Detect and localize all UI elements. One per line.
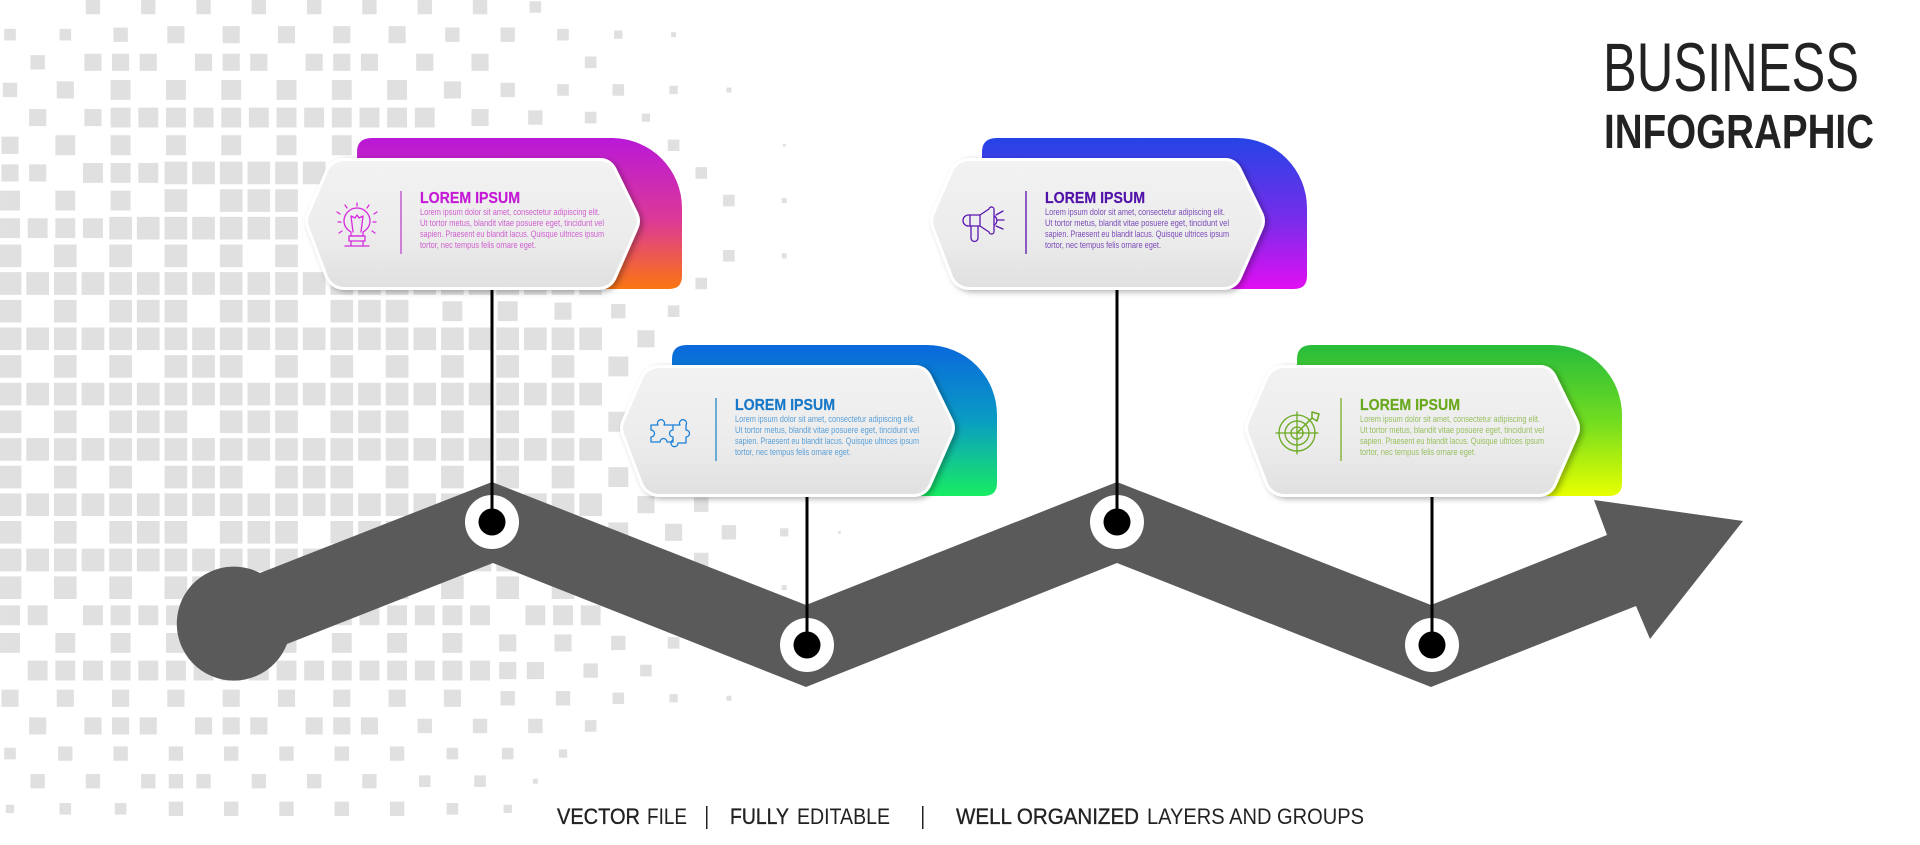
panel: idea bbox=[306, 138, 682, 289]
hexagon card bbox=[622, 366, 954, 496]
footer tagline: VECTOR bbox=[557, 804, 640, 829]
marker 2 bbox=[780, 610, 834, 672]
body text: tortor, nec tempus felis ornare eget. bbox=[735, 447, 851, 458]
gradient backing tab bbox=[982, 138, 1307, 289]
body text bbox=[1045, 207, 1229, 251]
body text: tortor, nec tempus felis ornare eget. bbox=[1360, 447, 1476, 458]
icon: puzzle pieces bbox=[651, 420, 690, 447]
body text: sapien. Praesent eu blandit lacus. Quisque ultrices ipsum bbox=[735, 436, 919, 447]
leader lines bbox=[492, 288, 1432, 645]
divider bbox=[1340, 398, 1342, 461]
gradient backing tab bbox=[357, 138, 682, 289]
divider bbox=[1025, 191, 1027, 254]
heading: LOREM IPSUM bbox=[420, 190, 520, 207]
body text bbox=[420, 207, 604, 251]
hexagon card bbox=[1246, 366, 1578, 496]
heading: LOREM IPSUM bbox=[735, 397, 835, 414]
gradient backing tab bbox=[672, 345, 997, 496]
body text bbox=[735, 414, 919, 458]
body text: Lorem ipsum dolor sit amet, consectetur adipiscing elit. bbox=[1360, 414, 1540, 425]
body text: Ut tortor metus, blandit vitae posuere eget, tincidunt vel bbox=[1360, 425, 1544, 436]
body text: Lorem ipsum dolor sit amet, consectetur adipiscing elit. bbox=[735, 414, 915, 425]
body text: sapien. Praesent eu blandit lacus. Quisque ultrices ipsum bbox=[420, 229, 604, 240]
body text: Ut tortor metus, blandit vitae posuere eget, tincidunt vel bbox=[735, 425, 919, 436]
timeline arrow bbox=[177, 482, 1743, 687]
hexagon card bbox=[306, 160, 638, 288]
panel: target bbox=[1246, 345, 1622, 496]
body text: Ut tortor metus, blandit vitae posuere eget, tincidunt vel bbox=[420, 218, 604, 229]
footer tagline: WELL ORGANIZED bbox=[956, 804, 1139, 829]
body text: tortor, nec tempus felis ornare eget. bbox=[420, 240, 536, 251]
body text: Lorem ipsum dolor sit amet, consectetur adipiscing elit. bbox=[420, 207, 600, 218]
footer tagline bbox=[557, 804, 1364, 829]
body text: Ut tortor metus, blandit vitae posuere eget, tincidunt vel bbox=[1045, 218, 1229, 229]
body text: tortor, nec tempus felis ornare eget. bbox=[1045, 240, 1161, 251]
body text: Lorem ipsum dolor sit amet, consectetur adipiscing elit. bbox=[1045, 207, 1225, 218]
footer tagline: EDITABLE bbox=[797, 804, 890, 829]
body text: sapien. Praesent eu blandit lacus. Quisque ultrices ipsum bbox=[1360, 436, 1544, 447]
footer tagline: LAYERS AND GROUPS bbox=[1147, 804, 1364, 829]
icon: target bbox=[1276, 412, 1319, 454]
icon: light bulb bbox=[337, 203, 377, 246]
marker 1 bbox=[465, 490, 519, 549]
gradient backing tab bbox=[1297, 345, 1622, 496]
panel: puzzle bbox=[622, 345, 997, 496]
hexagon card bbox=[932, 160, 1264, 288]
heading: LOREM IPSUM bbox=[1360, 397, 1460, 414]
divider bbox=[715, 398, 717, 461]
footer tagline: FILE bbox=[647, 804, 687, 829]
title bbox=[1603, 29, 1874, 159]
divider bbox=[400, 191, 402, 254]
footer tagline: FULLY bbox=[730, 804, 789, 829]
marker 3 bbox=[1090, 490, 1144, 549]
marker 4 bbox=[1405, 610, 1459, 672]
body text bbox=[1360, 414, 1544, 458]
heading: LOREM IPSUM bbox=[1045, 190, 1145, 207]
icon: megaphone bbox=[963, 207, 1004, 241]
panel: megaphone bbox=[932, 138, 1307, 289]
body text: sapien. Praesent eu blandit lacus. Quisque ultrices ipsum bbox=[1045, 229, 1229, 240]
